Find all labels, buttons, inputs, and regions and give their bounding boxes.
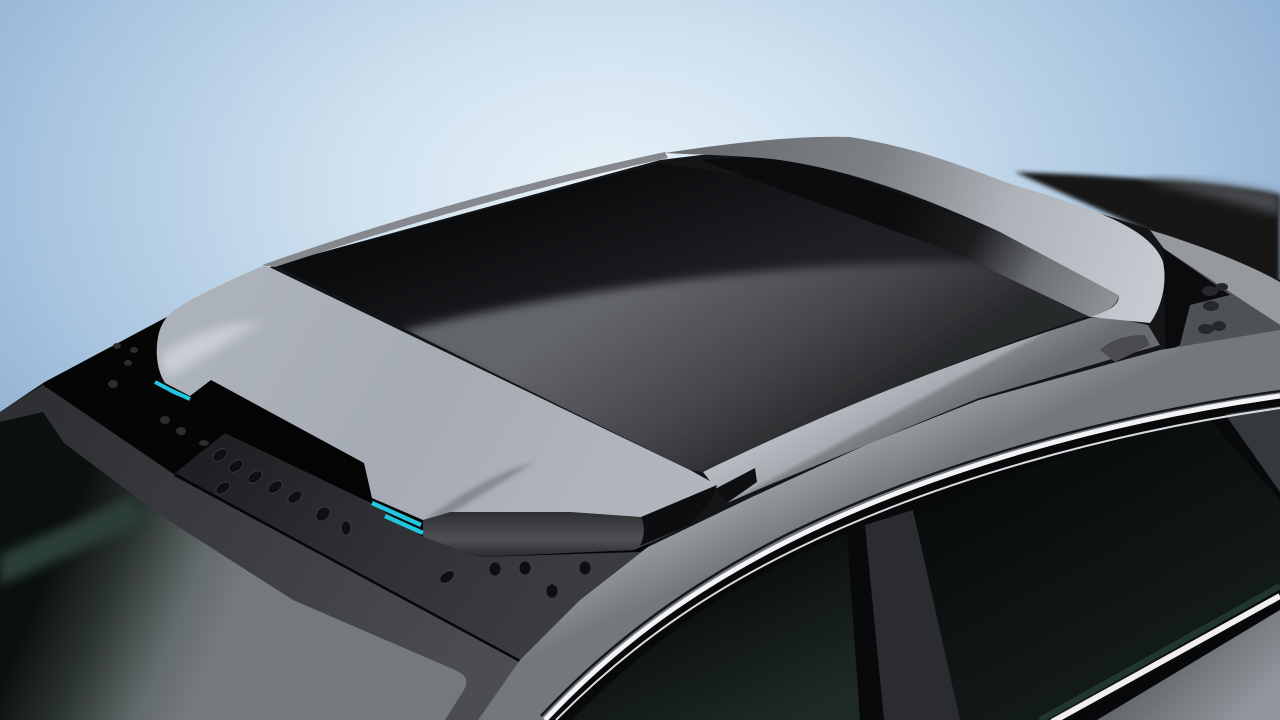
lower roof plate xyxy=(175,433,690,661)
left roof rail xyxy=(262,152,668,267)
lip dark end xyxy=(640,485,717,546)
rear roof plate xyxy=(1163,248,1280,352)
faint bolts on black roof xyxy=(108,343,209,446)
front sensor pod xyxy=(156,265,717,520)
cyan light right xyxy=(372,503,423,533)
door pillar xyxy=(865,510,960,720)
door black line xyxy=(1075,605,1280,720)
right roof rail xyxy=(703,318,1160,503)
rear car roof in distance xyxy=(1015,172,1280,325)
plate edge line xyxy=(175,475,520,661)
lower door panel xyxy=(1097,610,1280,720)
black recess below front pod xyxy=(189,380,375,503)
side body panel xyxy=(478,330,1280,720)
door chrome strip xyxy=(1052,596,1280,720)
far rear quarter window xyxy=(1225,406,1280,492)
windshield streak xyxy=(0,497,150,585)
cyan light left xyxy=(155,382,190,399)
side window rear xyxy=(913,420,1280,720)
centre glass roof xyxy=(275,163,1100,480)
windshield frame xyxy=(0,385,520,720)
windshield xyxy=(0,410,507,720)
side window front xyxy=(572,533,860,720)
roof bolts xyxy=(211,446,591,598)
chrome window trim xyxy=(541,391,1280,720)
black roof front panel xyxy=(43,318,660,662)
rear plate shadow xyxy=(1163,248,1230,352)
front pod lip xyxy=(423,485,717,557)
frame below chrome xyxy=(545,396,1280,720)
rear sensor pod xyxy=(665,137,1165,323)
rear roof studs xyxy=(1198,283,1228,334)
door trim strip xyxy=(1040,586,1280,720)
rail end block xyxy=(715,468,757,503)
